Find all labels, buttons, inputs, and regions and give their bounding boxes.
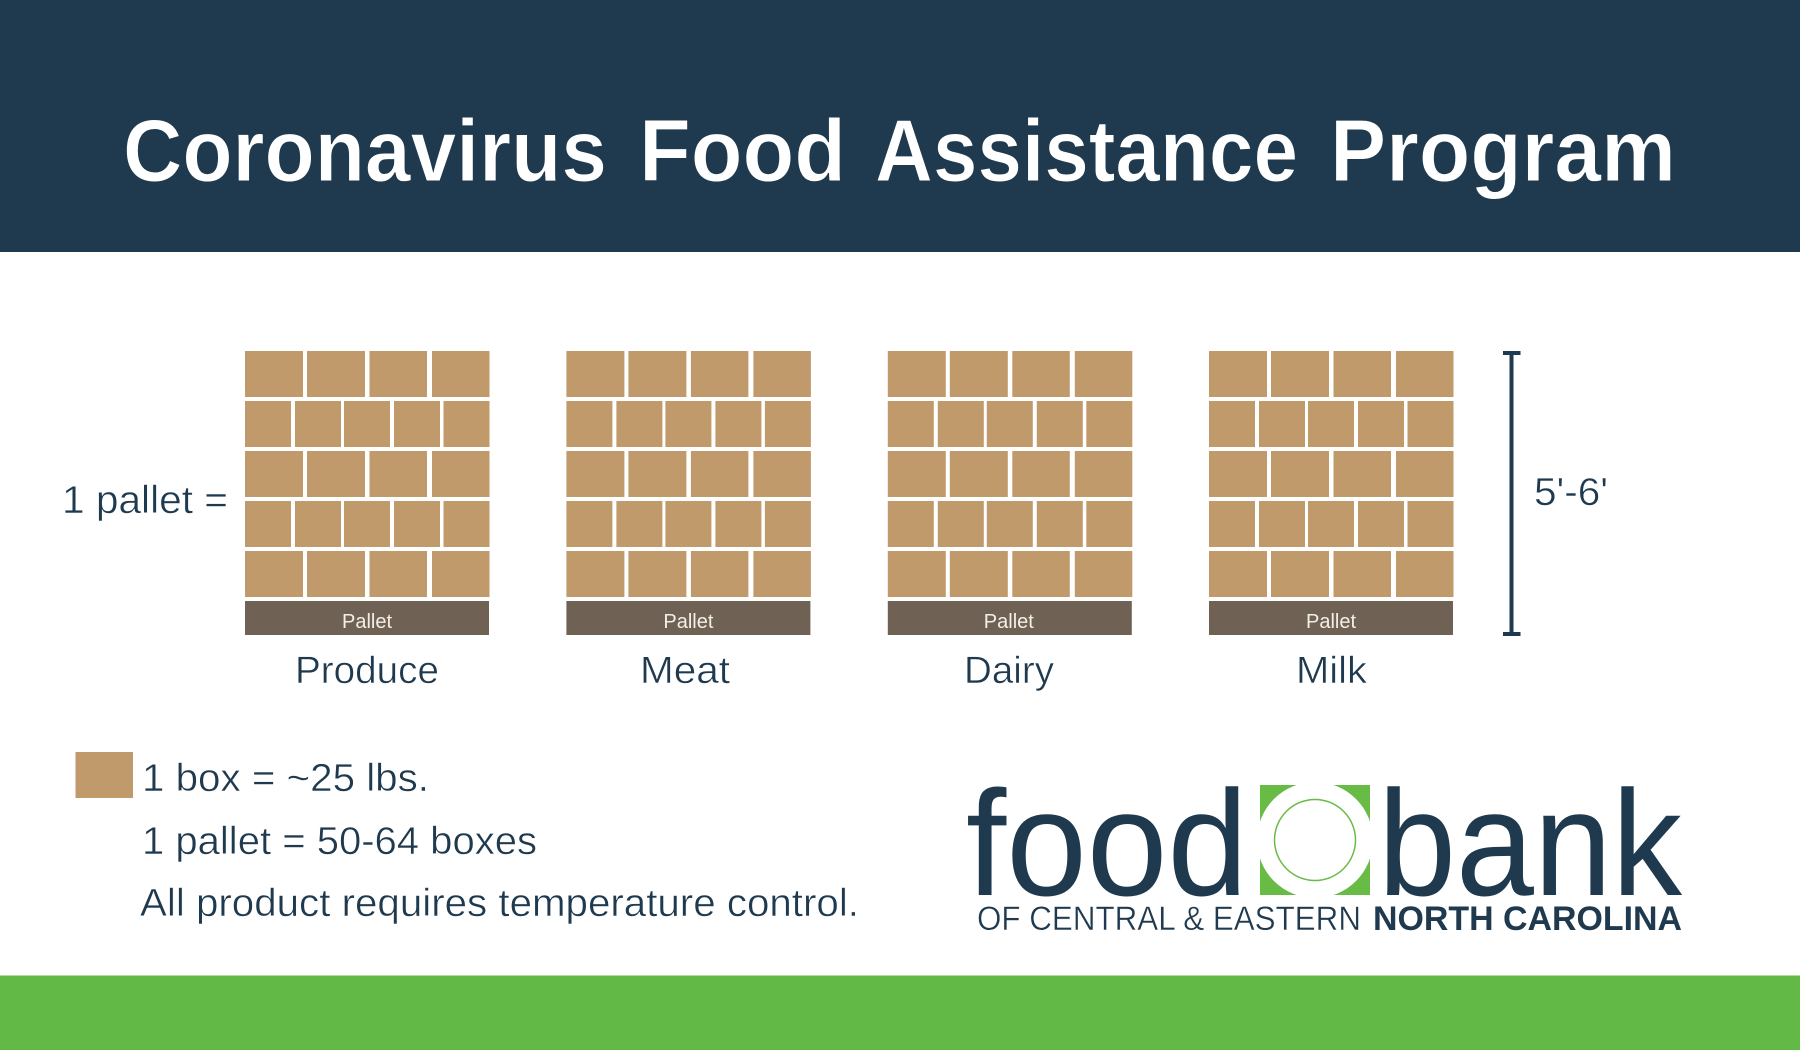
title: Coronavirus bbox=[123, 101, 607, 200]
logo word: bank: bank bbox=[1378, 759, 1683, 927]
panel: meat pallet stack bbox=[566, 351, 811, 635]
footer band bbox=[0, 976, 1800, 1050]
panel: dairy pallet stack bbox=[888, 351, 1132, 635]
logo icon: plate bbox=[1257, 782, 1373, 898]
panel: milk pallet stack: Pallet bbox=[1306, 611, 1356, 633]
title bbox=[123, 101, 1676, 200]
logo: food bank bbox=[966, 759, 1683, 938]
label: milk: Milk bbox=[1296, 650, 1368, 692]
logo word: food: food bbox=[966, 759, 1248, 927]
height bracket bbox=[1503, 351, 1520, 636]
label: height range: 5'-6' bbox=[1534, 471, 1608, 514]
panel: meat pallet stack: Pallet bbox=[663, 611, 714, 633]
label: 1 pallet equals: 1 pallet = bbox=[62, 479, 228, 522]
legend: box swatch bbox=[76, 752, 133, 798]
logo tagline: of central and eastern: OF CENTRAL & EASTERN bbox=[977, 900, 1361, 938]
header band bbox=[0, 0, 1800, 252]
title: Food bbox=[639, 101, 846, 200]
panel: dairy pallet stack: Pallet bbox=[984, 611, 1034, 633]
panel: produce pallet stack: Pallet bbox=[342, 611, 392, 633]
legend text: temperature note: All product requires temperature control. bbox=[140, 882, 859, 925]
legend text: box weight: 1 box = ~25 lbs. bbox=[142, 757, 429, 800]
panel: produce pallet stack bbox=[245, 351, 490, 635]
label: produce: Produce bbox=[295, 650, 439, 692]
panel: milk pallet stack bbox=[1209, 351, 1454, 635]
label: dairy: Dairy bbox=[964, 650, 1054, 692]
title: Assistance bbox=[875, 101, 1298, 200]
title: Program bbox=[1330, 101, 1676, 200]
label: meat: Meat bbox=[640, 650, 730, 692]
logo tagline: north carolina: NORTH CAROLINA bbox=[1373, 900, 1682, 938]
legend text: boxes per pallet: 1 pallet = 50-64 boxes bbox=[142, 820, 537, 863]
